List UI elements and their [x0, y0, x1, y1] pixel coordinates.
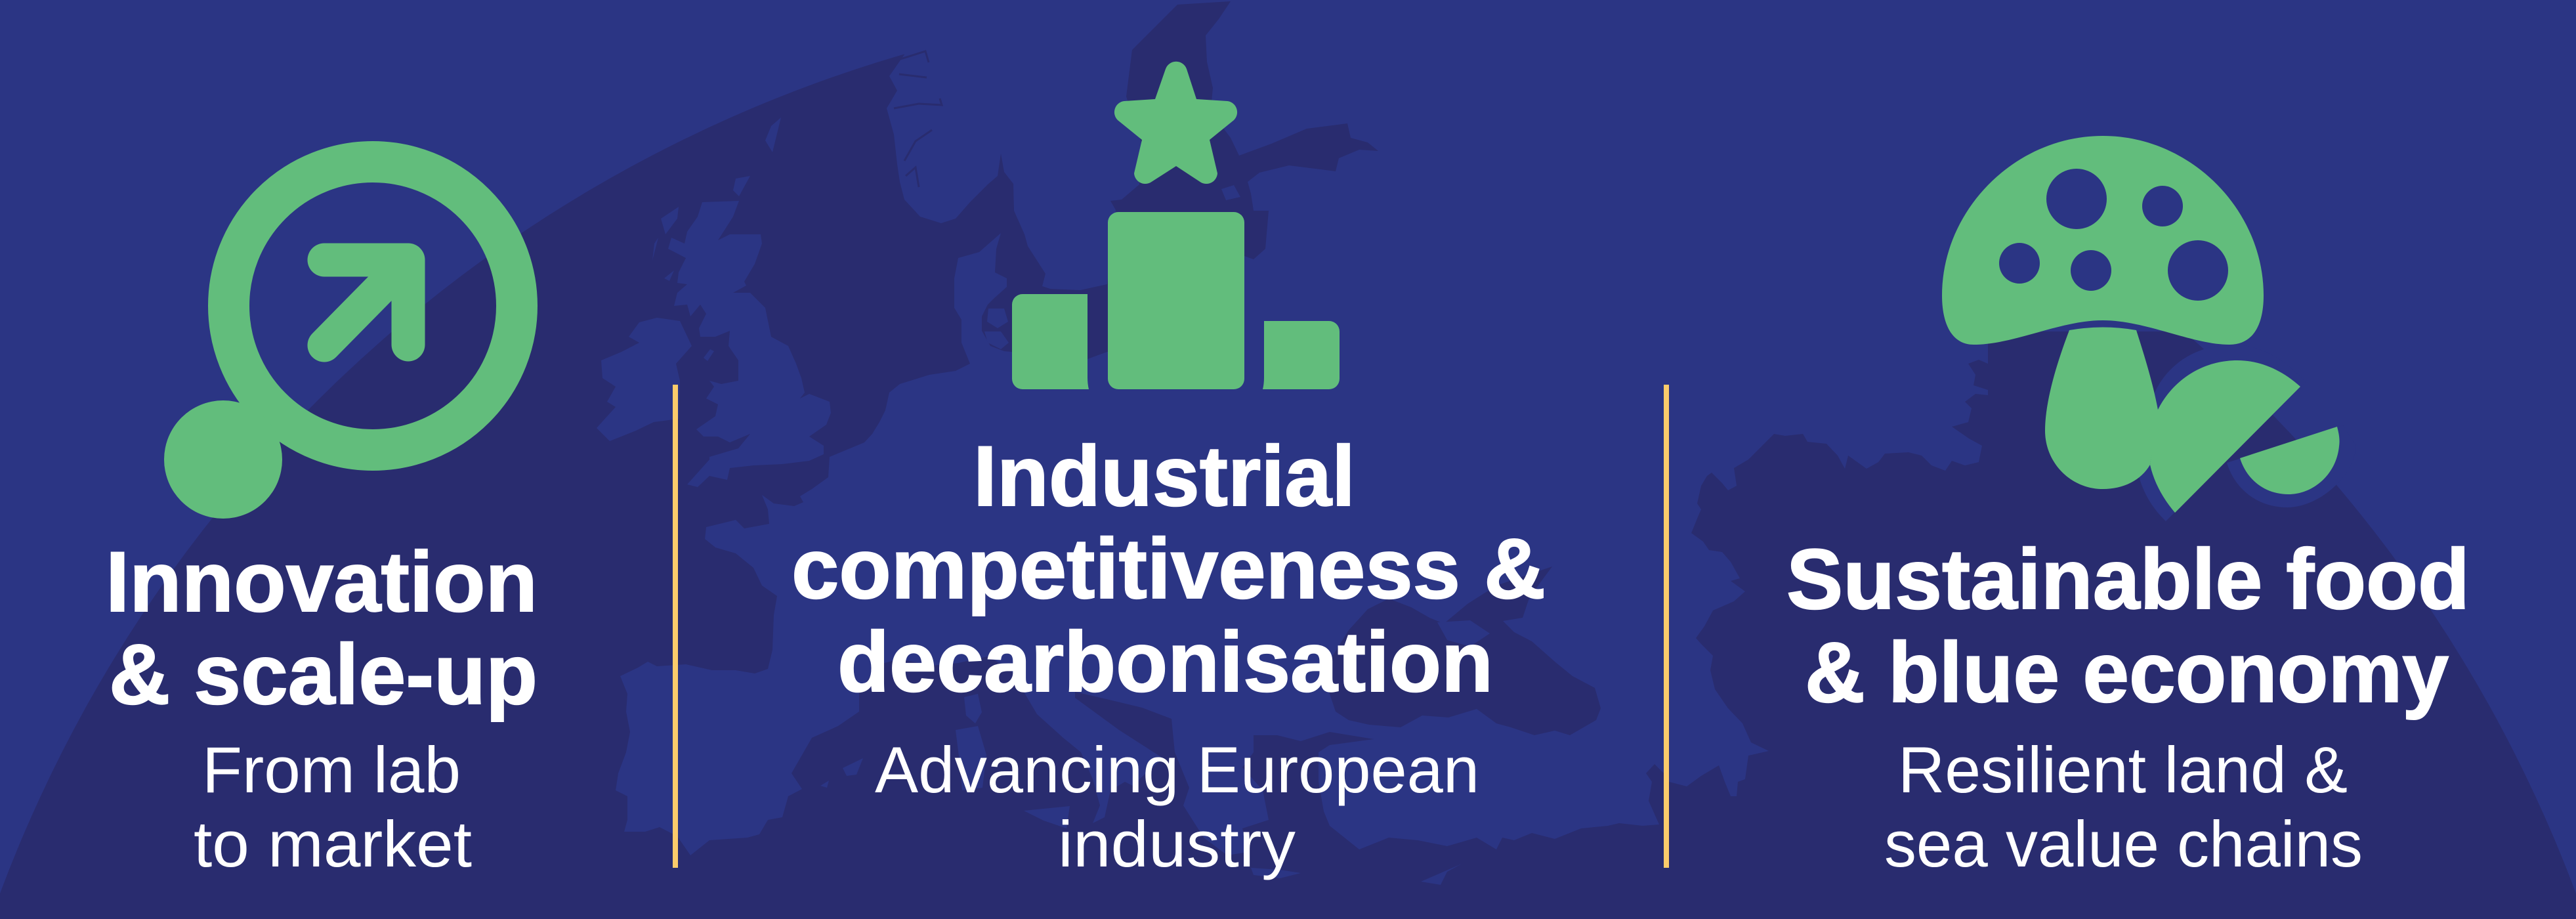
subheading: Resilient land & sea value chains — [1884, 733, 2363, 880]
panel: innovation and scale-up — [106, 161, 538, 880]
heading: Industrial competitiveness & decarbonisation: competitiveness & — [792, 521, 1546, 616]
panel: sustainable food and blue economy — [1786, 136, 2470, 880]
heading: Industrial competitiveness & decarbonisation — [792, 428, 1546, 710]
icon: podium with star — [1012, 62, 1340, 389]
panel: industrial competitiveness and decarbonisation — [792, 62, 1546, 880]
subheading: From lab to market: to market — [194, 807, 472, 880]
heading: Industrial competitiveness & decarbonisation: Industrial — [973, 428, 1355, 524]
map: continental Europe land — [616, 0, 2576, 855]
subheading: Advancing European industry: industry — [1058, 807, 1296, 880]
map: Great Britain — [668, 201, 831, 487]
heading: Sustainable food & blue economy — [1786, 531, 2470, 720]
map: Crimea — [1437, 620, 1490, 647]
subheading: Resilient land & sea value chains: Resilient land & — [1898, 733, 2348, 806]
heading: Innovation & scale-up — [106, 534, 538, 722]
map: islands — [652, 118, 1462, 885]
subheading: Resilient land & sea value chains: sea value chains — [1884, 807, 2363, 880]
icon: mushroom with leaves — [1942, 136, 2356, 521]
map: Ireland — [597, 318, 692, 441]
subheading: From lab to market — [194, 733, 472, 880]
subheading: From lab to market: From lab — [202, 733, 461, 806]
map: Black Sea and Azov — [1326, 566, 1601, 735]
heading: Industrial competitiveness & decarbonisation: decarbonisation — [837, 614, 1493, 710]
subheading: Advancing European industry: Advancing European — [875, 733, 1479, 806]
heading: Innovation & scale-up: & scale-up — [109, 626, 538, 722]
icon: magnifier ring with up-right arrow — [164, 161, 517, 519]
heading: Innovation & scale-up: Innovation — [106, 534, 538, 630]
divider: left — [673, 385, 678, 868]
heading: Sustainable food & blue economy: Sustainable food — [1786, 531, 2470, 627]
subheading: Advancing European industry — [875, 733, 1479, 880]
heading: Sustainable food & blue economy: & blue economy — [1805, 624, 2449, 720]
divider: right — [1664, 385, 1669, 868]
map: Norwegian fjords — [894, 51, 942, 187]
